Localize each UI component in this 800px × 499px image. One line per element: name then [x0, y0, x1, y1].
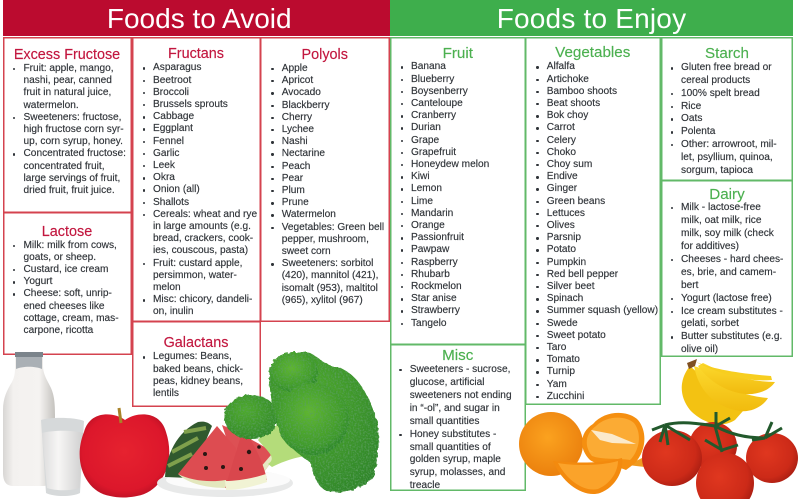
list: dairy foods: bert [681, 280, 698, 291]
panel heading: Misc: Misc [442, 346, 473, 364]
list: excess fructose foods: watermelon. [24, 100, 79, 110]
panel: Excess Fructose [2, 37, 132, 213]
list: starch foods: Other: arrowroot, mil- [681, 139, 777, 150]
panel: Vegetables [525, 37, 660, 405]
list: fructan foods: persimmon, water- [153, 270, 237, 281]
list: polyol foods: Avocado [282, 87, 321, 98]
list: misc foods to enjoy: small quantities [410, 416, 479, 427]
list: misc foods to enjoy: treacle [410, 480, 440, 491]
list: lactose foods: Cheese: soft, unrip- [24, 288, 112, 299]
list: vegetables to enjoy: Bok choy [547, 110, 588, 121]
list: polyol foods: Cherry [282, 112, 312, 123]
list: vegetables to enjoy: Beat shoots [547, 98, 600, 109]
heading: Foods to Avoid: Foods to Avoid [107, 3, 292, 34]
panel: Polyols [260, 37, 390, 322]
list: excess fructose foods: high fructose corn syr- [24, 124, 124, 135]
list: polyol foods: Vegetables: Green bell [282, 222, 384, 233]
list: fruit to enjoy: Lemon [411, 183, 442, 194]
list: dairy foods: es, brie, and camem- [681, 267, 776, 278]
heading: Foods to Enjoy [390, 0, 793, 36]
list: excess fructose foods: concentrated fruit, [24, 161, 105, 172]
list: lactose foods: carpone, ricotta [24, 325, 93, 336]
list: excess fructose foods: fruit in natural juice, [24, 87, 111, 98]
panel heading: Starch: Starch [705, 44, 749, 62]
list: fruit to enjoy: Pawpaw [411, 244, 449, 255]
panel heading: Polyols: Polyols [302, 47, 348, 63]
list: vegetables to enjoy: Swede [547, 318, 578, 329]
image: orange wedge [553, 458, 622, 494]
list: polyol foods: sweet corn [282, 246, 331, 257]
list: fruit to enjoy: Banana [411, 61, 446, 72]
list: vegetables to enjoy: Carrot [547, 122, 575, 133]
list: fruit to enjoy: Kiwi [411, 171, 430, 182]
list: starch foods: sorgum, tapioca [681, 165, 753, 176]
list: vegetables to enjoy: Lettuces [547, 208, 585, 219]
list: excess fructose foods: nashi, pear, canned [24, 75, 112, 86]
list: fructan foods: in large amounts (e.g. [153, 221, 251, 232]
list: fructan foods: on, inulin [153, 306, 194, 317]
list: excess fructose foods: Sweeteners: fructose, [24, 112, 121, 123]
list: dairy foods: milk, soy milk (check [681, 228, 774, 239]
list: polyol foods: (420), mannitol (421), [282, 270, 378, 281]
list: fructan foods: Okra [153, 172, 175, 183]
list: dairy foods: Cheeses - hard chees- [681, 254, 783, 265]
list: fructan foods: melon [153, 282, 181, 293]
list: polyol foods: Blackberry [282, 100, 330, 110]
list: fruit to enjoy: Durian [411, 122, 441, 133]
list: misc foods to enjoy: in “-ol”, and sugar in [410, 403, 500, 414]
list: vegetables to enjoy: Ginger [547, 183, 577, 194]
list: polyol foods: Prune [282, 197, 309, 208]
list: polyol foods: Nectarine [282, 148, 325, 159]
list: vegetables to enjoy: Choy sum [547, 159, 592, 170]
list: excess fructose foods: Fruit: apple, mango, [24, 63, 114, 74]
list: misc foods to enjoy: sweeteners not ending [410, 390, 512, 401]
list: vegetables to enjoy: Turnip [547, 366, 575, 377]
list: dairy foods: Milk - lactose-free [681, 202, 761, 213]
image: red apple [80, 408, 169, 498]
list: vegetables to enjoy: Alfalfa [547, 61, 575, 72]
list: excess fructose foods: Concentrated fructose: [24, 148, 126, 159]
list: fructan foods: Broccoli [153, 87, 189, 98]
list: fructan foods: Garlic [153, 148, 179, 159]
list: fructan foods: bread, crackers, cook- [153, 233, 253, 244]
list: galactan foods: Legumes: Beans, [153, 351, 232, 362]
list: fructan foods: Fruit: custard apple, [153, 258, 242, 269]
list: starch foods: let, psyllium, quinoa, [681, 152, 773, 163]
list: fruit to enjoy: Raspberry [411, 257, 458, 268]
list: fructan foods: Eggplant [153, 123, 193, 134]
list: polyol foods: Sweeteners: sorbitol [282, 258, 373, 269]
list: vegetables to enjoy: Red bell pepper [547, 269, 618, 280]
list: polyol foods: Plum [282, 185, 305, 196]
list: misc foods to enjoy: Honey substitutes - [410, 429, 496, 440]
list: misc foods to enjoy: small quantities of [410, 442, 491, 453]
panel: Misc [390, 344, 526, 490]
image: milk bottle [3, 352, 55, 486]
list: fructan foods: ies, couscous, pasta) [153, 245, 248, 256]
list: fruit to enjoy: Canteloupe [411, 98, 463, 109]
list: fructan foods: Cereals: wheat and rye [153, 209, 257, 220]
list: fructan foods: Onion (all) [153, 184, 200, 195]
list: vegetables to enjoy: Bamboo shoots [547, 86, 617, 97]
list: fruit to enjoy: Cranberry [411, 110, 456, 121]
image: broccoli [224, 352, 379, 492]
list: vegetables to enjoy: Green beans [547, 196, 605, 207]
image: whole orange [519, 412, 583, 476]
list: excess fructose foods: dried fruit, fruit juice. [24, 185, 115, 196]
list: fruit to enjoy: Star anise [411, 293, 457, 304]
list: vegetables to enjoy: Pumpkin [547, 257, 586, 268]
list: polyol foods: isomalt (953), maltitol [282, 283, 378, 294]
list: polyol foods: Lychee [282, 124, 314, 135]
list: polyol foods: pepper, mushroom, [282, 234, 369, 245]
list: lactose foods: Milk: milk from cows, [24, 240, 117, 251]
list: vegetables to enjoy: Endive [547, 171, 578, 182]
heading: Foods to Enjoy: Foods to Enjoy [497, 3, 686, 34]
list: vegetables to enjoy: Sweet potato [547, 330, 606, 341]
list: fruit to enjoy: Passionfruit [411, 232, 464, 243]
image: watermelon [165, 422, 277, 490]
list: fruit to enjoy: Boysenberry [411, 86, 468, 97]
list: starch foods: Polenta [681, 126, 715, 137]
list: starch foods: Rice [681, 101, 701, 112]
list: fructan foods: Misc: chicory, dandeli- [153, 294, 252, 305]
list: fructan foods: Fennel [153, 136, 184, 147]
list: dairy foods: Yogurt (lactose free) [681, 293, 772, 304]
list: fructan foods: Asparagus [153, 62, 201, 73]
list: vegetables to enjoy: Potato [547, 244, 576, 255]
list: dairy foods: Ice cream substitutes - [681, 306, 783, 317]
list: lactose foods: goats, or sheep. [24, 252, 96, 263]
panel heading: Galactans: Galactans [164, 334, 228, 350]
panel: Fruit [390, 37, 526, 344]
list: vegetables to enjoy: Zucchini [547, 391, 584, 402]
list: fructan foods: Leek [153, 160, 175, 171]
list: misc foods to enjoy [399, 364, 512, 491]
list: fructan foods: Shallots [153, 197, 189, 208]
list: fruit to enjoy: Mandarin [411, 208, 453, 219]
panel heading: Excess Fructose: Excess Fructose [14, 47, 120, 63]
list: vegetables to enjoy: Tomato [547, 354, 580, 365]
list: fructan foods: Beetroot [153, 74, 191, 86]
list: fruit to enjoy: Orange [411, 220, 445, 231]
panel: Starch [661, 37, 793, 180]
list: lactose foods [13, 240, 119, 336]
panel: Dairy [661, 180, 793, 356]
panel: Galactans [132, 321, 260, 407]
list: polyol foods: (965), xylitol (967) [282, 295, 363, 306]
image: bananas [682, 359, 775, 424]
list: misc foods to enjoy: golden syrup, maple [410, 454, 501, 465]
panel heading: Dairy: Dairy [709, 186, 745, 202]
list: vegetables to enjoy: Artichoke [547, 74, 589, 85]
list: fruit to enjoy: Strawberry [411, 305, 460, 316]
list: vegetables to enjoy: Yam [547, 379, 567, 390]
list: vegetables to enjoy: Celery [547, 135, 576, 146]
list: starch foods: Gluten free bread or [681, 62, 772, 73]
list: excess fructose foods [13, 63, 126, 196]
list: polyol foods: Peach [282, 161, 310, 172]
list: polyol foods: Apricot [282, 75, 313, 86]
image: plate [157, 469, 293, 497]
list: starch foods: 100% spelt bread [681, 88, 760, 99]
list: vegetables to enjoy: Parsnip [547, 232, 581, 243]
list: vegetables to enjoy: Taro [547, 342, 566, 353]
list: lactose foods: cottage, cream, mas- [24, 313, 119, 324]
list: vegetables to enjoy: Olives [547, 220, 575, 231]
list: galactan foods: lentils [153, 388, 179, 399]
list: fruit to enjoy: Grapefruit [411, 147, 456, 158]
list: lactose foods: Custard, ice cream [24, 264, 108, 275]
list: vegetables to enjoy: Silver beet [547, 281, 595, 292]
list: polyol foods: Apple [282, 63, 308, 74]
list: dairy foods [671, 202, 783, 355]
list: polyol foods: Watermelon [282, 209, 336, 220]
list: dairy foods: milk, oat milk, rice [681, 215, 761, 226]
list: galactan foods: peas, kidney beans, [153, 376, 243, 387]
list: vegetables to enjoy: Spinach [547, 293, 583, 304]
list: fruit to enjoy: Grape [411, 135, 439, 146]
list: dairy foods: for additives) [681, 241, 739, 252]
list: fruit to enjoy: Tangelo [411, 318, 446, 329]
panel: Fructans [132, 37, 260, 322]
panel heading: Lactose: Lactose [42, 224, 92, 240]
list: misc foods to enjoy: glucose, artificial [410, 377, 485, 388]
list: starch foods: Oats [681, 113, 702, 124]
list: fruit to enjoy [401, 61, 489, 329]
list: vegetables to enjoy: Choko [547, 147, 576, 158]
list: vegetables to enjoy: Summer squash (yellow) [547, 305, 658, 316]
list: polyol foods [271, 63, 384, 306]
list: fruit to enjoy: Blueberry [411, 74, 454, 85]
list: fructan foods [143, 62, 257, 317]
heading: Foods to Avoid [2, 0, 390, 36]
list: fruit to enjoy: Lime [411, 196, 433, 207]
list: lactose foods: Yogurt [24, 276, 52, 287]
list: excess fructose foods: up, corn syrup, honey. [24, 136, 123, 147]
panel: Lactose [2, 212, 132, 355]
list: vegetables to enjoy [536, 61, 658, 402]
list: galactan foods [143, 351, 243, 399]
list: galactan foods: baked beans, chick- [153, 364, 243, 374]
list: excess fructose foods: large servings of fruit, [24, 173, 120, 184]
panel heading: Fruit: Fruit [443, 44, 473, 62]
list: dairy foods: gelati, sorbet [681, 318, 739, 329]
list: misc foods to enjoy: Sweeteners - sucrose, [410, 364, 510, 375]
list: dairy foods: olive oil) [681, 344, 718, 355]
panel heading: Fructans: Fructans [168, 46, 224, 62]
list: starch foods [671, 62, 777, 176]
list: fruit to enjoy: Rhubarb [411, 269, 450, 280]
list: starch foods: cereal products [681, 75, 750, 86]
list: fructan foods: Cabbage [153, 111, 194, 122]
list: dairy foods: Butter substitutes (e.g. [681, 331, 782, 342]
image: glass of milk [41, 418, 84, 496]
list: polyol foods: Nashi [282, 136, 308, 147]
list: misc foods to enjoy: syrup, molasses, and [410, 467, 505, 478]
list: polyol foods: Pear [282, 173, 303, 184]
list: fruit to enjoy: Honeydew melon [411, 159, 489, 170]
panel heading: Vegetables: Vegetables [555, 44, 630, 61]
list: lactose foods: ened cheeses like [24, 301, 105, 312]
list: fruit to enjoy: Rockmelon [411, 281, 462, 292]
list: fructan foods: Brussels sprouts [153, 99, 228, 110]
image: tomatoes on the vine [642, 412, 798, 499]
image: cut orange [582, 413, 646, 470]
